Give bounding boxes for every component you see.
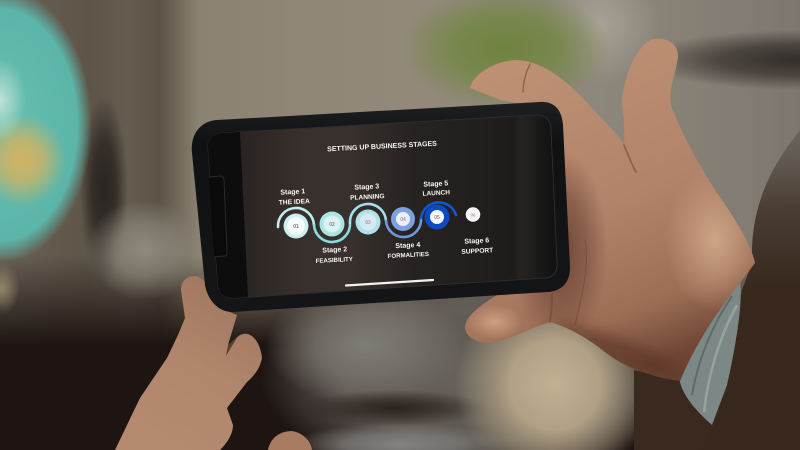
stage 01 node [284,214,308,238]
phone screen [208,115,557,298]
stage 2 label [315,246,353,265]
stage 06 node [466,207,480,222]
phone notch [209,176,227,257]
blurred globe [0,0,94,264]
person's torso, dark foreground [634,130,800,450]
stage 02 node [320,212,344,236]
stage 1 label: THE IDEA [279,198,310,207]
stage 02 node: 02 [329,222,335,228]
home indicator [346,280,433,286]
stage 05 node: 05 [434,215,440,221]
phone screen content [278,141,493,286]
stage 4 label: FORMALITIES [388,251,429,260]
stage 3 label [349,183,385,202]
stage 04 node: 04 [400,217,406,223]
phone body [192,102,570,312]
stage 06 node: 06 [470,212,476,217]
stage 3 label: Stage 3 [354,183,380,192]
right hand [465,39,755,384]
stage 2 label: FEASIBILITY [316,256,353,265]
stage 03 node [356,210,380,234]
stage 03 node: 03 [365,220,371,226]
stage 6 label [461,237,493,256]
stage 4 label [387,241,429,260]
black display bezel [208,132,248,298]
stage 3 label: PLANNING [350,193,385,202]
stage 4 label: Stage 4 [395,242,421,250]
stage 6 label: SUPPORT [461,247,493,256]
hand creases [523,64,636,325]
stage 04 node [391,207,415,231]
stage 1 label: Stage 1 [280,188,306,197]
stage 01 node: 01 [293,224,299,230]
wave connector [278,202,456,242]
stage 5 label: LAUNCH [422,189,450,198]
shirt cuff [679,281,741,425]
title: SETTING UP BUSINESS STAGES [327,141,437,153]
blurred plant [390,0,615,112]
stage 1 label [278,188,310,207]
stage 05 node [424,204,450,230]
stage 5 label: Stage 5 [423,180,449,189]
stage 5 label [422,180,450,198]
stage 6 label: Stage 6 [464,237,490,246]
left hand [115,276,312,450]
stage 2 label: Stage 2 [322,246,347,255]
